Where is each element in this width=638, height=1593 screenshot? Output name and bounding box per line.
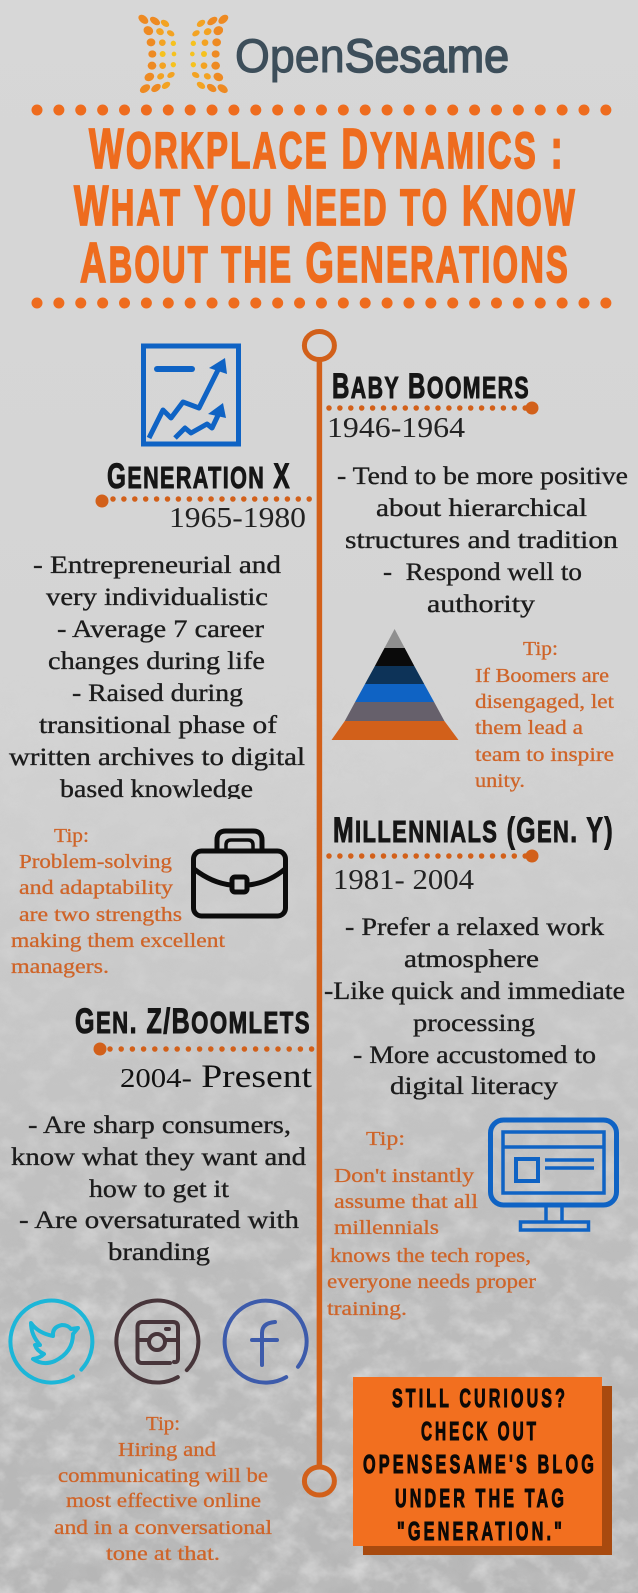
heading: GEN. Z/BOOMLETS <box>75 1002 311 1041</box>
tip: Don't instantly <box>334 1165 474 1187</box>
icon: twitter <box>10 1301 92 1383</box>
tip: and adaptability <box>19 877 173 899</box>
description <box>324 914 625 1100</box>
icon: pyramid <box>332 629 458 740</box>
description: written archives to digital <box>9 744 305 771</box>
description: - Are sharp consumers, <box>28 1112 291 1139</box>
dotted connector <box>96 494 315 508</box>
tip: making them excellent <box>11 930 226 952</box>
tip: managers. <box>11 956 109 978</box>
tip: Tip: <box>54 825 89 847</box>
title: WHAT YOU NEED TO KNOW <box>74 174 577 238</box>
callout: still curious <box>353 1377 612 1555</box>
section: Gen Z <box>10 1002 315 1565</box>
logo wordmark: OpenSesame <box>235 29 509 82</box>
tip <box>327 1128 536 1320</box>
icon: monitor <box>490 1120 616 1230</box>
description: changes during life <box>48 648 265 675</box>
section: Generation X <box>9 457 315 978</box>
dotted divider top <box>37 104 606 116</box>
tip: and in a conversational <box>54 1517 273 1539</box>
tip: unity. <box>475 770 525 792</box>
icon: instagram <box>116 1301 198 1383</box>
timeline <box>304 332 334 1495</box>
section: Baby Boomers <box>327 367 628 792</box>
description: - More accustomed to <box>353 1042 596 1069</box>
heading: MILLENNIALS (GEN. Y) <box>333 811 614 850</box>
tip: them lead a <box>475 717 583 739</box>
title <box>74 117 577 295</box>
description: based knowledge <box>60 776 253 803</box>
description: digital literacy <box>390 1073 559 1100</box>
tip: tone at that. <box>106 1543 220 1565</box>
section: Millennials <box>324 811 625 1320</box>
tip: assume that all <box>334 1191 479 1213</box>
icon: facebook <box>225 1301 307 1383</box>
tip: Hiring and <box>118 1439 216 1461</box>
tip: most effective online <box>66 1490 261 1512</box>
callout: still curious: CHECK OUT <box>421 1416 539 1446</box>
background <box>0 792 638 1593</box>
tip: communicating will be <box>58 1465 268 1487</box>
years: 2004- Present <box>120 1059 312 1095</box>
dotted connector <box>329 850 538 862</box>
tip: training. <box>327 1298 407 1320</box>
description: very individualistic <box>46 584 268 611</box>
years: 1946-1964 <box>327 413 465 444</box>
icons: social media <box>10 1301 307 1383</box>
description: - Tend to be more positive <box>337 463 628 490</box>
description: about hierarchical <box>376 495 587 522</box>
tip: knows the tech ropes, <box>330 1245 531 1267</box>
description: - Are oversaturated with <box>19 1207 300 1234</box>
description <box>11 1112 307 1266</box>
dotted divider bottom <box>37 298 606 308</box>
description: branding <box>108 1239 211 1266</box>
tip <box>54 1413 273 1565</box>
years: 1965-1980 <box>169 503 306 534</box>
description: structures and tradition <box>345 527 619 554</box>
logo: OpenSesame <box>137 13 509 95</box>
dotted connector <box>94 1042 315 1056</box>
description: how to get it <box>89 1176 229 1203</box>
title: WORKPLACE DYNAMICS : <box>89 117 565 181</box>
icon: blue growth chart <box>144 346 238 444</box>
tip: Tip: <box>523 638 558 660</box>
icon: logo dots <box>137 13 230 95</box>
icon: briefcase <box>194 831 286 916</box>
description: - Raised during <box>72 680 244 707</box>
tip: Problem-solving <box>19 851 172 873</box>
tip: millennials <box>334 1217 439 1239</box>
description: - Prefer a relaxed work <box>345 914 605 941</box>
heading: GENERATION X <box>107 457 291 496</box>
years: 1981- 2004 <box>333 865 474 896</box>
tip: team to inspire <box>475 744 614 766</box>
heading: BABY BOOMERS <box>332 367 530 406</box>
tip <box>475 638 615 792</box>
description <box>337 463 628 618</box>
description: know what they want and <box>11 1144 307 1171</box>
tip: everyone needs proper <box>327 1271 536 1293</box>
description: - Entrepreneurial and <box>33 552 282 579</box>
description: authority <box>427 591 536 618</box>
tip: disengaged, let <box>475 691 615 713</box>
description: transitional phase of <box>39 712 278 739</box>
description: processing <box>413 1010 536 1037</box>
description <box>9 552 305 803</box>
tip: Tip: <box>146 1413 180 1435</box>
description: - Average 7 career <box>57 616 265 643</box>
description: -Like quick and immediate <box>324 978 625 1005</box>
tip <box>11 825 226 978</box>
tip: Tip: <box>366 1128 405 1150</box>
tip: are two strengths <box>19 904 182 926</box>
dotted connector <box>329 402 538 414</box>
description: - Respond well to <box>383 559 582 586</box>
tip: If Boomers are <box>475 665 609 687</box>
description: atmosphere <box>404 946 539 973</box>
